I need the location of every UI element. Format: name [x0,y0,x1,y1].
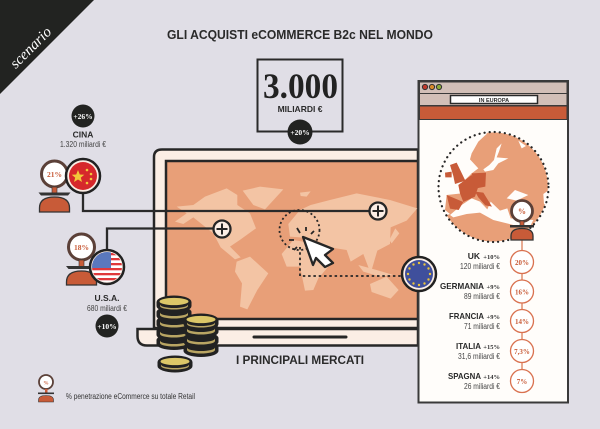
row: Spagna: 7% [517,378,527,386]
row: Germania: GERMANIA [440,281,484,291]
growth badge: China: +26% [73,112,93,121]
row: Italia: 7,3% [514,348,530,356]
row: Italia: ITALIA [456,341,481,351]
legend [38,375,195,402]
scale icon: USA [66,234,97,285]
world map [175,187,417,309]
growth badge: USA [96,314,118,338]
legend scale icon: % [43,380,49,386]
heading: main markets: I PRINCIPALI MERCATI [236,353,364,367]
label: China [60,130,106,149]
corner banner: scenario: scenario [7,24,55,72]
marker plus: America [214,220,230,238]
row: UK: +10% [483,254,500,261]
total value box: MILIARDI € [278,104,323,114]
row: Francia: +9% [487,314,500,321]
growth badge: USA: +10% [97,322,117,331]
corner banner: scenario [0,0,94,94]
dotted connector to EU flag [300,247,402,276]
legend scale icon [38,375,54,402]
legend text: % penetrazione eCommerce su totale Retail [66,392,195,401]
row: UK: UK [468,251,481,261]
row: Italia [456,340,534,362]
row: Germania: +9% [487,284,500,291]
icon: China flag [66,159,100,193]
row: Spagna [448,370,534,392]
label: China: CINA [73,130,93,140]
row: Spagna: +14% [483,374,500,381]
laptop screen [166,161,418,319]
row: UK [460,250,534,274]
scale icon: Europe [510,200,534,240]
scale icon: China: 21% [47,170,62,179]
laptop [138,150,418,346]
browser tab bar [420,82,567,94]
connector: USA to map [107,228,215,252]
row: Italia: +15% [483,344,500,351]
row: Francia: 14% [515,318,529,326]
europe map [433,127,551,242]
orange header band [420,106,567,120]
growth badge +20%: +20% [290,128,310,137]
total value box: 3.000 [263,66,338,106]
row: Francia [449,310,534,332]
label: China: 1.320 miliardi € [60,140,106,149]
connector between percentages [521,240,523,381]
stack left [156,296,192,350]
scale icon: Europe: % [518,207,526,216]
row: Francia: FRANCIA [449,311,484,321]
stack right [184,314,218,357]
dotted circle: Europe highlight [280,210,320,250]
dotted globe outline [438,132,548,242]
scale icon: USA: 18% [74,243,89,252]
browser address bar: IN EUROPA [479,98,509,104]
row: Italia: 31,6 miliardi € [458,352,500,361]
scale icon: China [38,161,70,212]
coin stacks [156,296,218,372]
panel: In Europa browser [418,81,568,402]
icon: EU flag [402,257,436,291]
row: Spagna: 26 miliardi € [464,382,500,391]
marker plus: Asia [370,202,386,220]
row: Spagna: SPAGNA [448,371,481,381]
single coin [158,356,192,372]
icon: USA flag [90,250,124,284]
row: Francia: 71 miliardi € [464,322,500,331]
trackpad slot [254,336,346,338]
laptop base [138,329,418,346]
label: USA [87,293,127,313]
title: GLI ACQUISTI eCOMMERCE B2c NEL MONDO [167,28,433,42]
browser address bar [420,94,567,106]
total value box [258,60,342,144]
cursor icon [289,227,333,267]
connector: China to map [83,190,370,211]
row: UK: 20% [515,259,529,267]
laptop lid [154,150,418,328]
row: Germania: 89 miliardi € [464,292,500,301]
label: USA: U.S.A. [94,293,120,303]
growth badge: China [72,104,94,128]
row: UK: 120 miliardi € [460,262,500,271]
row: Germania [440,280,534,303]
label: USA: 680 miliardi € [87,304,127,313]
row: Germania: 16% [515,288,529,296]
